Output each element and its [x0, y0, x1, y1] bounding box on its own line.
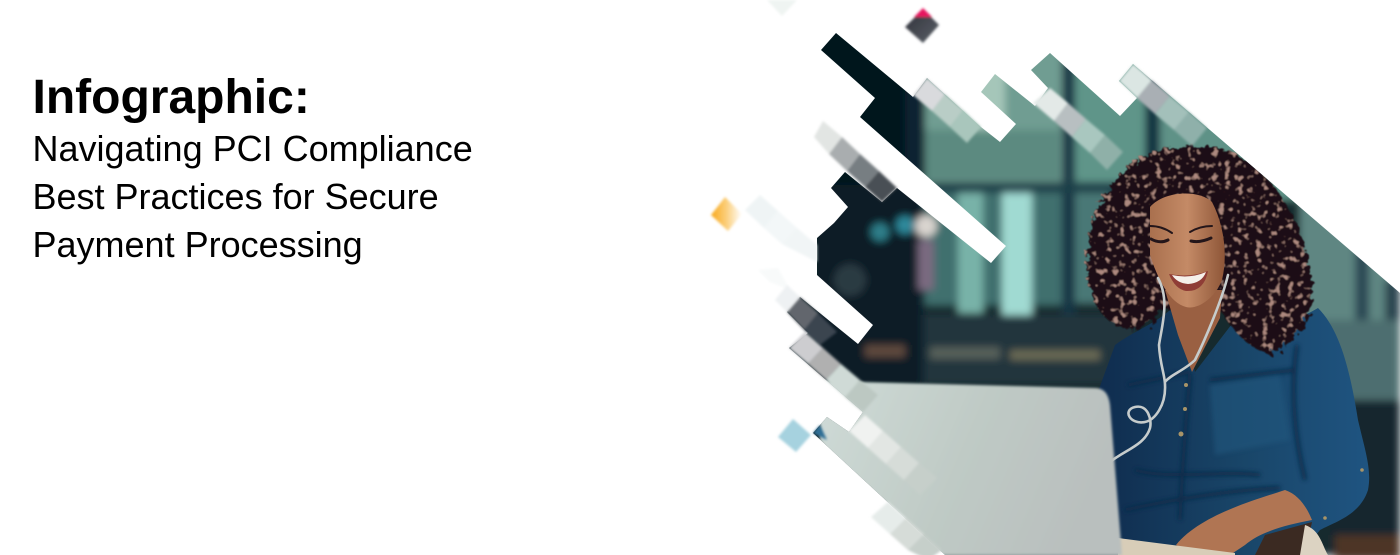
buttons: [1178, 383, 1364, 520]
laptop: [820, 381, 1122, 555]
woman: [1087, 145, 1369, 555]
tile stripe: bottom: [871, 502, 942, 555]
blurred office background: [787, 33, 1400, 555]
tile stripe: second band: [1033, 88, 1123, 170]
shirt folds: [1125, 345, 1305, 520]
tile stripe: above laptop: [789, 332, 878, 412]
hair: [1087, 145, 1312, 354]
icon: blue diamond: [778, 419, 811, 452]
tile stripe: third band: [1119, 64, 1207, 146]
neck and chest: [1165, 290, 1222, 372]
tile stripe: fading to dark: [775, 285, 837, 345]
icon: small blue corner: [813, 425, 827, 440]
desk edge: [1118, 538, 1235, 555]
tile stripe: on laptop: [849, 415, 937, 495]
icon: pink and dark diamond: [905, 8, 939, 43]
subtitle line 1: Navigating PCI Compliance: [32, 128, 473, 169]
icon: faint top tile: [767, 0, 797, 16]
shirt highlight: [1211, 377, 1282, 454]
photo: woman with laptop in stair-stepped diagonal mask: [787, 33, 1400, 555]
title block: [32, 71, 473, 265]
smile: [1169, 271, 1208, 291]
tile stripe: top black band: [913, 78, 981, 143]
forearm and hand: [1176, 490, 1312, 555]
icon: yellow diamond: [711, 197, 742, 231]
heading: Infographic: Infographic:: [32, 71, 310, 124]
earphone cable: [1110, 275, 1228, 462]
subtitle line 2: Best Practices for Secure: [32, 176, 439, 217]
tile stripe: white band: [814, 121, 897, 202]
shirt: [1095, 305, 1369, 555]
tile stripe: faint left band: [745, 195, 817, 290]
face: [1150, 194, 1225, 307]
eyebrows and eyes: [1150, 226, 1212, 242]
cloth: [1300, 525, 1328, 555]
subtitle line 3: Payment Processing: [32, 224, 363, 265]
chair: [1255, 522, 1312, 555]
